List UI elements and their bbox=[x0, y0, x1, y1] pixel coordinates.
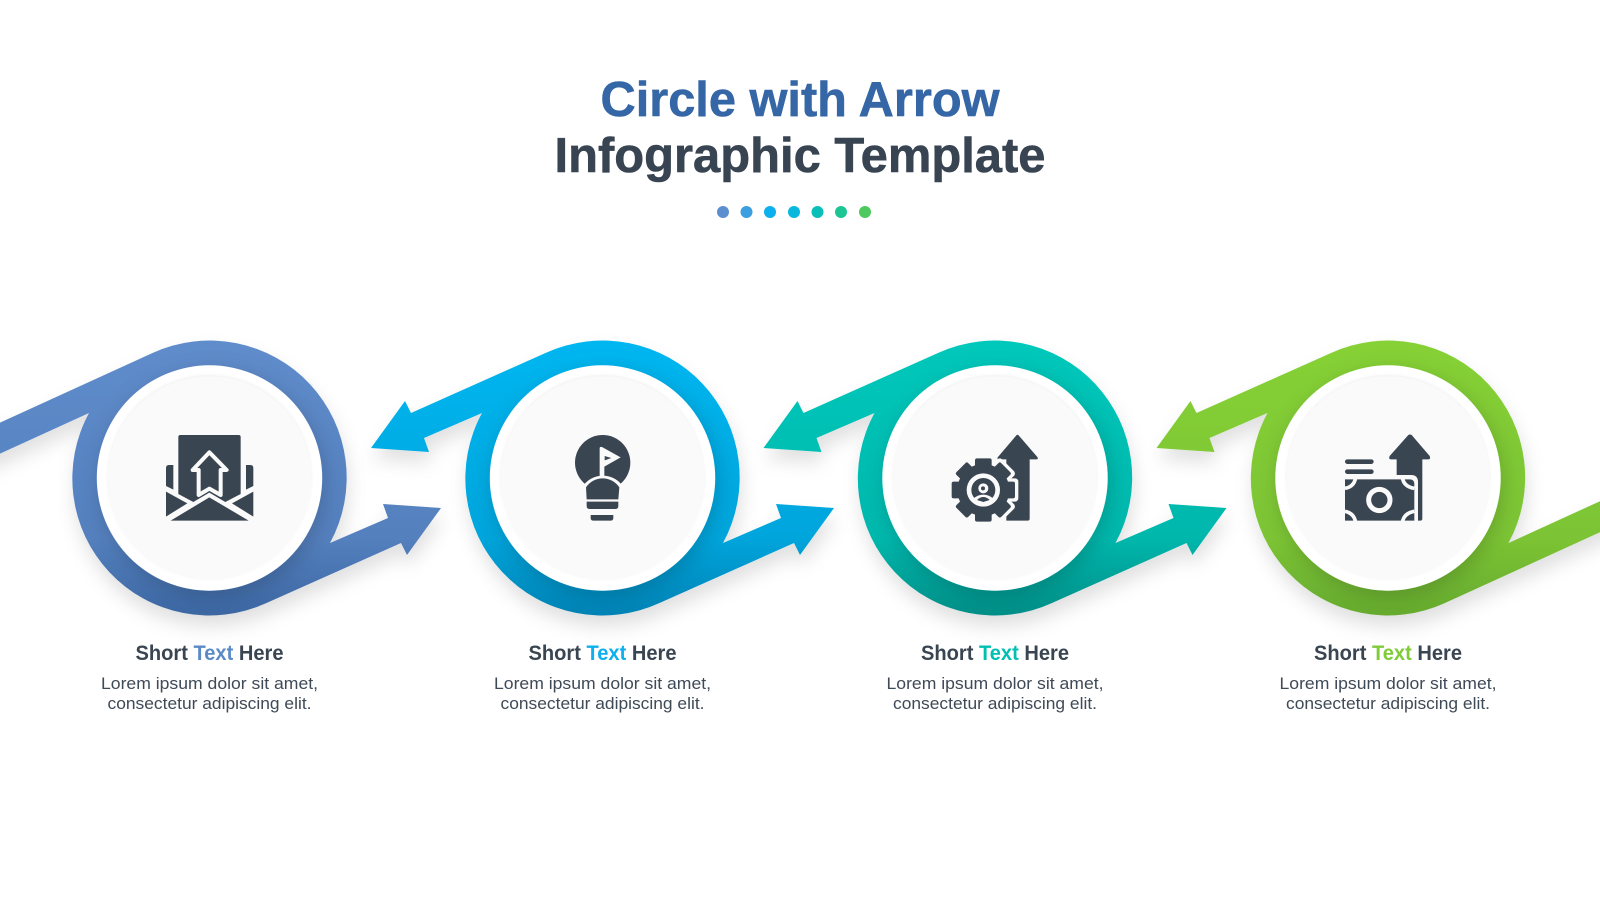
text block: step 2: Short Text Here bbox=[528, 642, 676, 665]
icon: gear with person and up arrow bbox=[952, 435, 1038, 522]
panel: step 3 circle with arrow bbox=[764, 341, 1226, 615]
title: Circle with Arrow bbox=[600, 73, 1000, 127]
icon: banknote with up arrow bbox=[1342, 434, 1430, 525]
text block: step 2 bbox=[494, 642, 711, 713]
panel: step 2 circle with arrow bbox=[371, 341, 834, 615]
text block: step 4 bbox=[1280, 642, 1496, 713]
title: Infographic Template bbox=[554, 129, 1046, 183]
panel: step 1 circle with arrow bbox=[0, 341, 441, 615]
text block: step 1: consectetur adipiscing elit. bbox=[108, 695, 312, 713]
text block: step 4: consectetur adipiscing elit. bbox=[1286, 695, 1490, 713]
text block: step 4: Lorem ipsum dolor sit amet, bbox=[1280, 675, 1496, 693]
text block: step 2: Lorem ipsum dolor sit amet, bbox=[494, 675, 711, 693]
icon: light bulb with flag bbox=[575, 435, 630, 521]
dot row bbox=[717, 206, 871, 218]
text block: step 2: consectetur adipiscing elit. bbox=[500, 695, 704, 713]
text block: step 3: Lorem ipsum dolor sit amet, bbox=[886, 675, 1104, 693]
text block: step 1: Short Text Here bbox=[136, 642, 284, 665]
text block: step 3 bbox=[886, 642, 1104, 713]
text block: step 1 bbox=[101, 642, 318, 713]
panel: step 4 circle with arrow bbox=[1156, 341, 1600, 615]
icon: open envelope with up arrow bbox=[166, 435, 253, 521]
text block: step 3: Short Text Here bbox=[921, 642, 1069, 665]
title bbox=[554, 73, 1046, 183]
text block: step 3: consectetur adipiscing elit. bbox=[893, 695, 1097, 713]
text block: step 4: Short Text Here bbox=[1314, 642, 1462, 665]
text block: step 1: Lorem ipsum dolor sit amet, bbox=[101, 675, 318, 693]
